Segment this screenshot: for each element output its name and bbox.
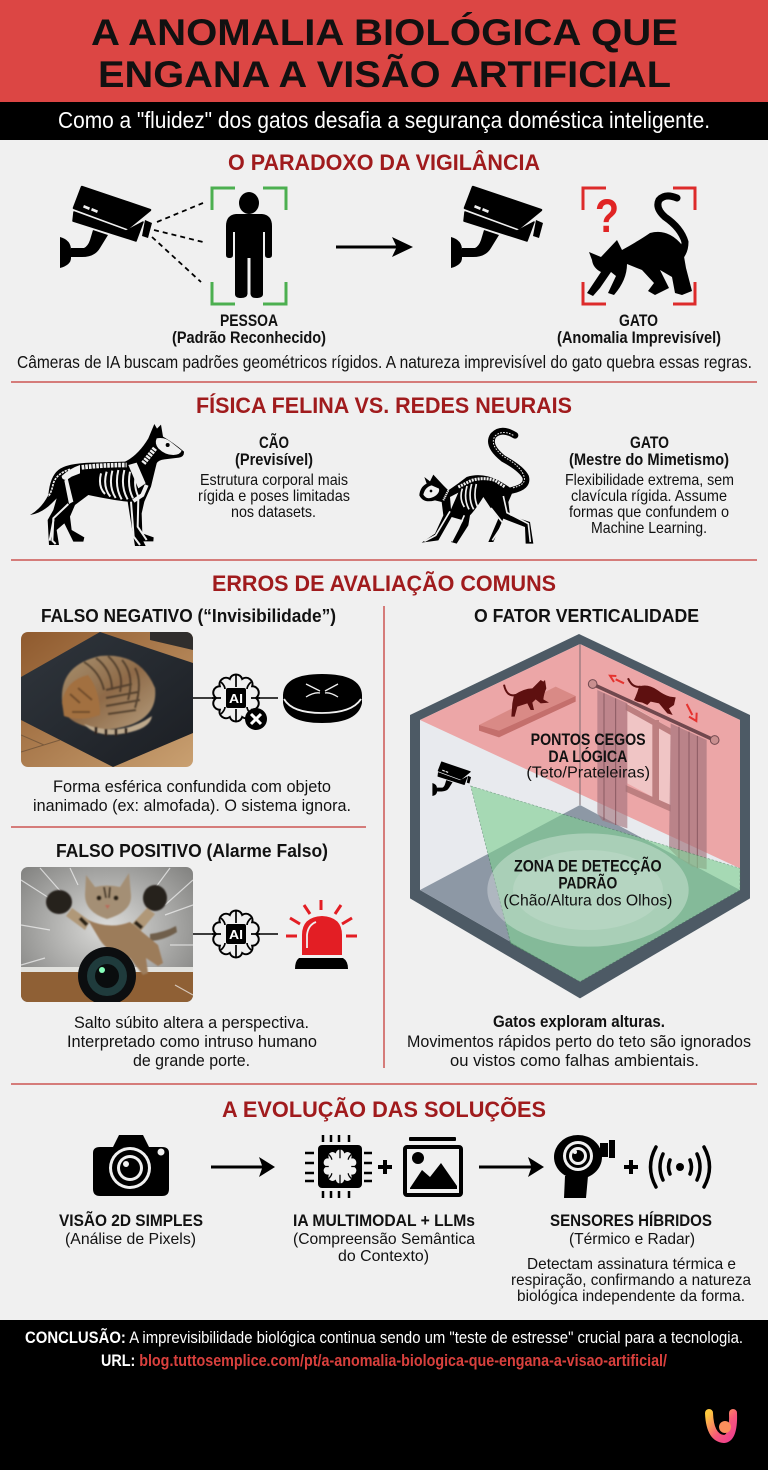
step: sensores híbridos: Detectam assinatura térmica e: [527, 1256, 736, 1273]
step: ia multimodal: [293, 1212, 475, 1265]
text block: Gatos exploram alturas.: [493, 1012, 665, 1031]
icon: image frame: [405, 1137, 461, 1195]
text block: Forma esférica confundida com objeto: [53, 777, 331, 796]
room diagram: [410, 634, 750, 998]
text block: inanimado (ex: almofada). O sistema ignora.: [33, 796, 351, 815]
step: ia multimodal: IA MULTIMODAL + LLMs: [293, 1212, 475, 1230]
step: ia multimodal: (Compreensão Semântica: [293, 1231, 475, 1248]
label: blind spots: (Teto/Prateleiras): [526, 764, 650, 781]
icon: person in green frame: [212, 188, 286, 304]
label: gato: [557, 312, 721, 347]
text block: Movimentos rápidos perto do teto são ignorados: [407, 1032, 751, 1051]
icon: camera: [93, 1135, 169, 1196]
heading: FALSO NEGATIVO (“Invisibilidade”): [41, 606, 336, 626]
icon: cat anomaly in red frame: [583, 188, 695, 304]
title: [91, 11, 678, 95]
text: cão: rígida e poses limitadas: [198, 488, 350, 505]
text block: Interpretado como intruso humano: [67, 1032, 317, 1051]
heading: A EVOLUÇÃO DAS SOLUÇÕES: [222, 1097, 546, 1122]
cat on curtain rod: [628, 678, 676, 715]
text: cão: Estrutura corporal mais: [200, 472, 348, 489]
text: gato: clavícula rígida. Assume: [571, 488, 727, 505]
icon: second camera: [451, 187, 543, 268]
text block: [407, 1012, 751, 1070]
text: gato: (Mestre do Mimetismo): [569, 451, 729, 469]
connector: [193, 697, 278, 699]
text: gato: GATO: [630, 434, 669, 452]
step: sensores híbridos: (Térmico e Radar): [569, 1231, 695, 1248]
step: sensores híbridos: respiração, confirmando a natureza: [511, 1272, 751, 1289]
icon: small camera in room: [432, 762, 471, 796]
icon: red alarm: [286, 900, 357, 969]
icon: cushion: [283, 674, 362, 723]
panel: falso negativo: [21, 606, 362, 815]
label: blind spots: DA LÓGICA: [548, 747, 628, 766]
heading: O PARADOXO DA VIGILÂNCIA: [228, 150, 540, 175]
arrow: [479, 1157, 544, 1177]
header: [0, 0, 768, 140]
icon: AI chip: [305, 1135, 372, 1198]
label: detection zone: PADRÃO: [558, 872, 618, 892]
label: pessoa: [172, 312, 326, 347]
text: cão: [198, 432, 350, 521]
photo: curled sleeping cat on mat: [21, 632, 193, 767]
panel: falso positivo: [21, 841, 357, 1070]
arrow: [336, 237, 413, 257]
text block: de grande porte.: [133, 1051, 250, 1070]
icon: AI brain with x: AI: [229, 691, 243, 706]
label: detection zone: ZONA DE DETECÇÃO: [514, 856, 662, 876]
text: gato: formas que confundem o: [569, 504, 729, 521]
icon: question mark: ?: [595, 189, 619, 242]
step: sensores híbridos: [511, 1211, 751, 1305]
text block: Salto súbito altera a perspectiva.: [74, 1013, 309, 1032]
icon: AI brain: [212, 910, 260, 958]
icon: thermal sensor: [554, 1135, 615, 1198]
panel: o paradoxo da vigilância: [17, 150, 752, 372]
icon: AI brain with x: [212, 674, 267, 730]
heading: ERROS DE AVALIAÇÃO COMUNS: [212, 571, 556, 596]
heading: FALSO POSITIVO (Alarme Falso): [56, 841, 328, 861]
step: sensores híbridos: SENSORES HÍBRIDOS: [550, 1211, 712, 1230]
text: gato: Flexibilidade extrema, sem: [565, 472, 734, 489]
zone: standard detection: [471, 786, 740, 982]
icon: logo: [709, 1413, 733, 1439]
heading: O FATOR VERTICALIDADE: [474, 606, 699, 626]
url: URL: blog.tuttosemplice.com/pt/a-anomalia-biologica-que-engana-a-visao-artificial/: [101, 1352, 667, 1370]
label: pessoa: PESSOA: [220, 312, 278, 330]
text: gato: Machine Learning.: [591, 520, 707, 537]
footer: [0, 1320, 768, 1470]
icon: cat skeleton: [419, 431, 533, 544]
step: sensores híbridos: biológica independente da forma.: [517, 1288, 745, 1305]
step: ia multimodal: do Contexto): [338, 1248, 429, 1265]
text: cão: CÃO: [259, 432, 289, 452]
text: gato: [565, 434, 734, 537]
text block: [67, 1013, 317, 1070]
label: pessoa: (Padrão Reconhecido): [172, 329, 326, 347]
icon: dog skeleton: [30, 424, 184, 546]
icon: plus: [624, 1160, 638, 1174]
photo: jumping cat over lens: [21, 867, 193, 1005]
panel: erros de avaliação comuns: [11, 571, 751, 1070]
label: gato: (Anomalia Imprevisível): [557, 329, 721, 347]
icon: camera scanning person: [60, 187, 203, 282]
text: cão: (Previsível): [235, 451, 313, 469]
red movement arrows: [610, 676, 697, 721]
icon: plus: [378, 1160, 392, 1174]
panel: a evolução das soluções: [59, 1097, 751, 1305]
text block: [33, 777, 351, 815]
step: visão 2d: (Análise de Pixels): [65, 1231, 196, 1248]
heading: FÍSICA FELINA VS. REDES NEURAIS: [196, 393, 572, 418]
title: A ANOMALIA BIOLÓGICA QUE: [91, 11, 678, 53]
label: blind spots: [526, 731, 650, 781]
panel: o fator verticalidade: [407, 606, 751, 1070]
arrow: [211, 1157, 275, 1177]
icon: radar waves: [650, 1147, 710, 1187]
panel: física felina vs redes neurais: [30, 393, 734, 546]
text: cão: nos datasets.: [231, 504, 316, 521]
window and curtains: [588, 680, 719, 869]
label: detection zone: [503, 856, 672, 910]
zone: blind spots: [420, 644, 740, 868]
step: visão 2d: [59, 1210, 203, 1248]
shelf with cat: [479, 680, 576, 737]
label: gato: GATO: [619, 312, 658, 330]
icon: AI brain: AI: [229, 927, 243, 942]
label: detection zone: (Chão/Altura dos Olhos): [503, 893, 672, 910]
label: blind spots: PONTOS CEGOS: [531, 731, 646, 749]
title: ENGANA A VISÃO ARTIFICIAL: [98, 53, 671, 95]
connector: [193, 933, 278, 935]
text block: ou vistos como falhas ambientais.: [450, 1051, 699, 1070]
step: visão 2d: VISÃO 2D SIMPLES: [59, 1210, 203, 1230]
